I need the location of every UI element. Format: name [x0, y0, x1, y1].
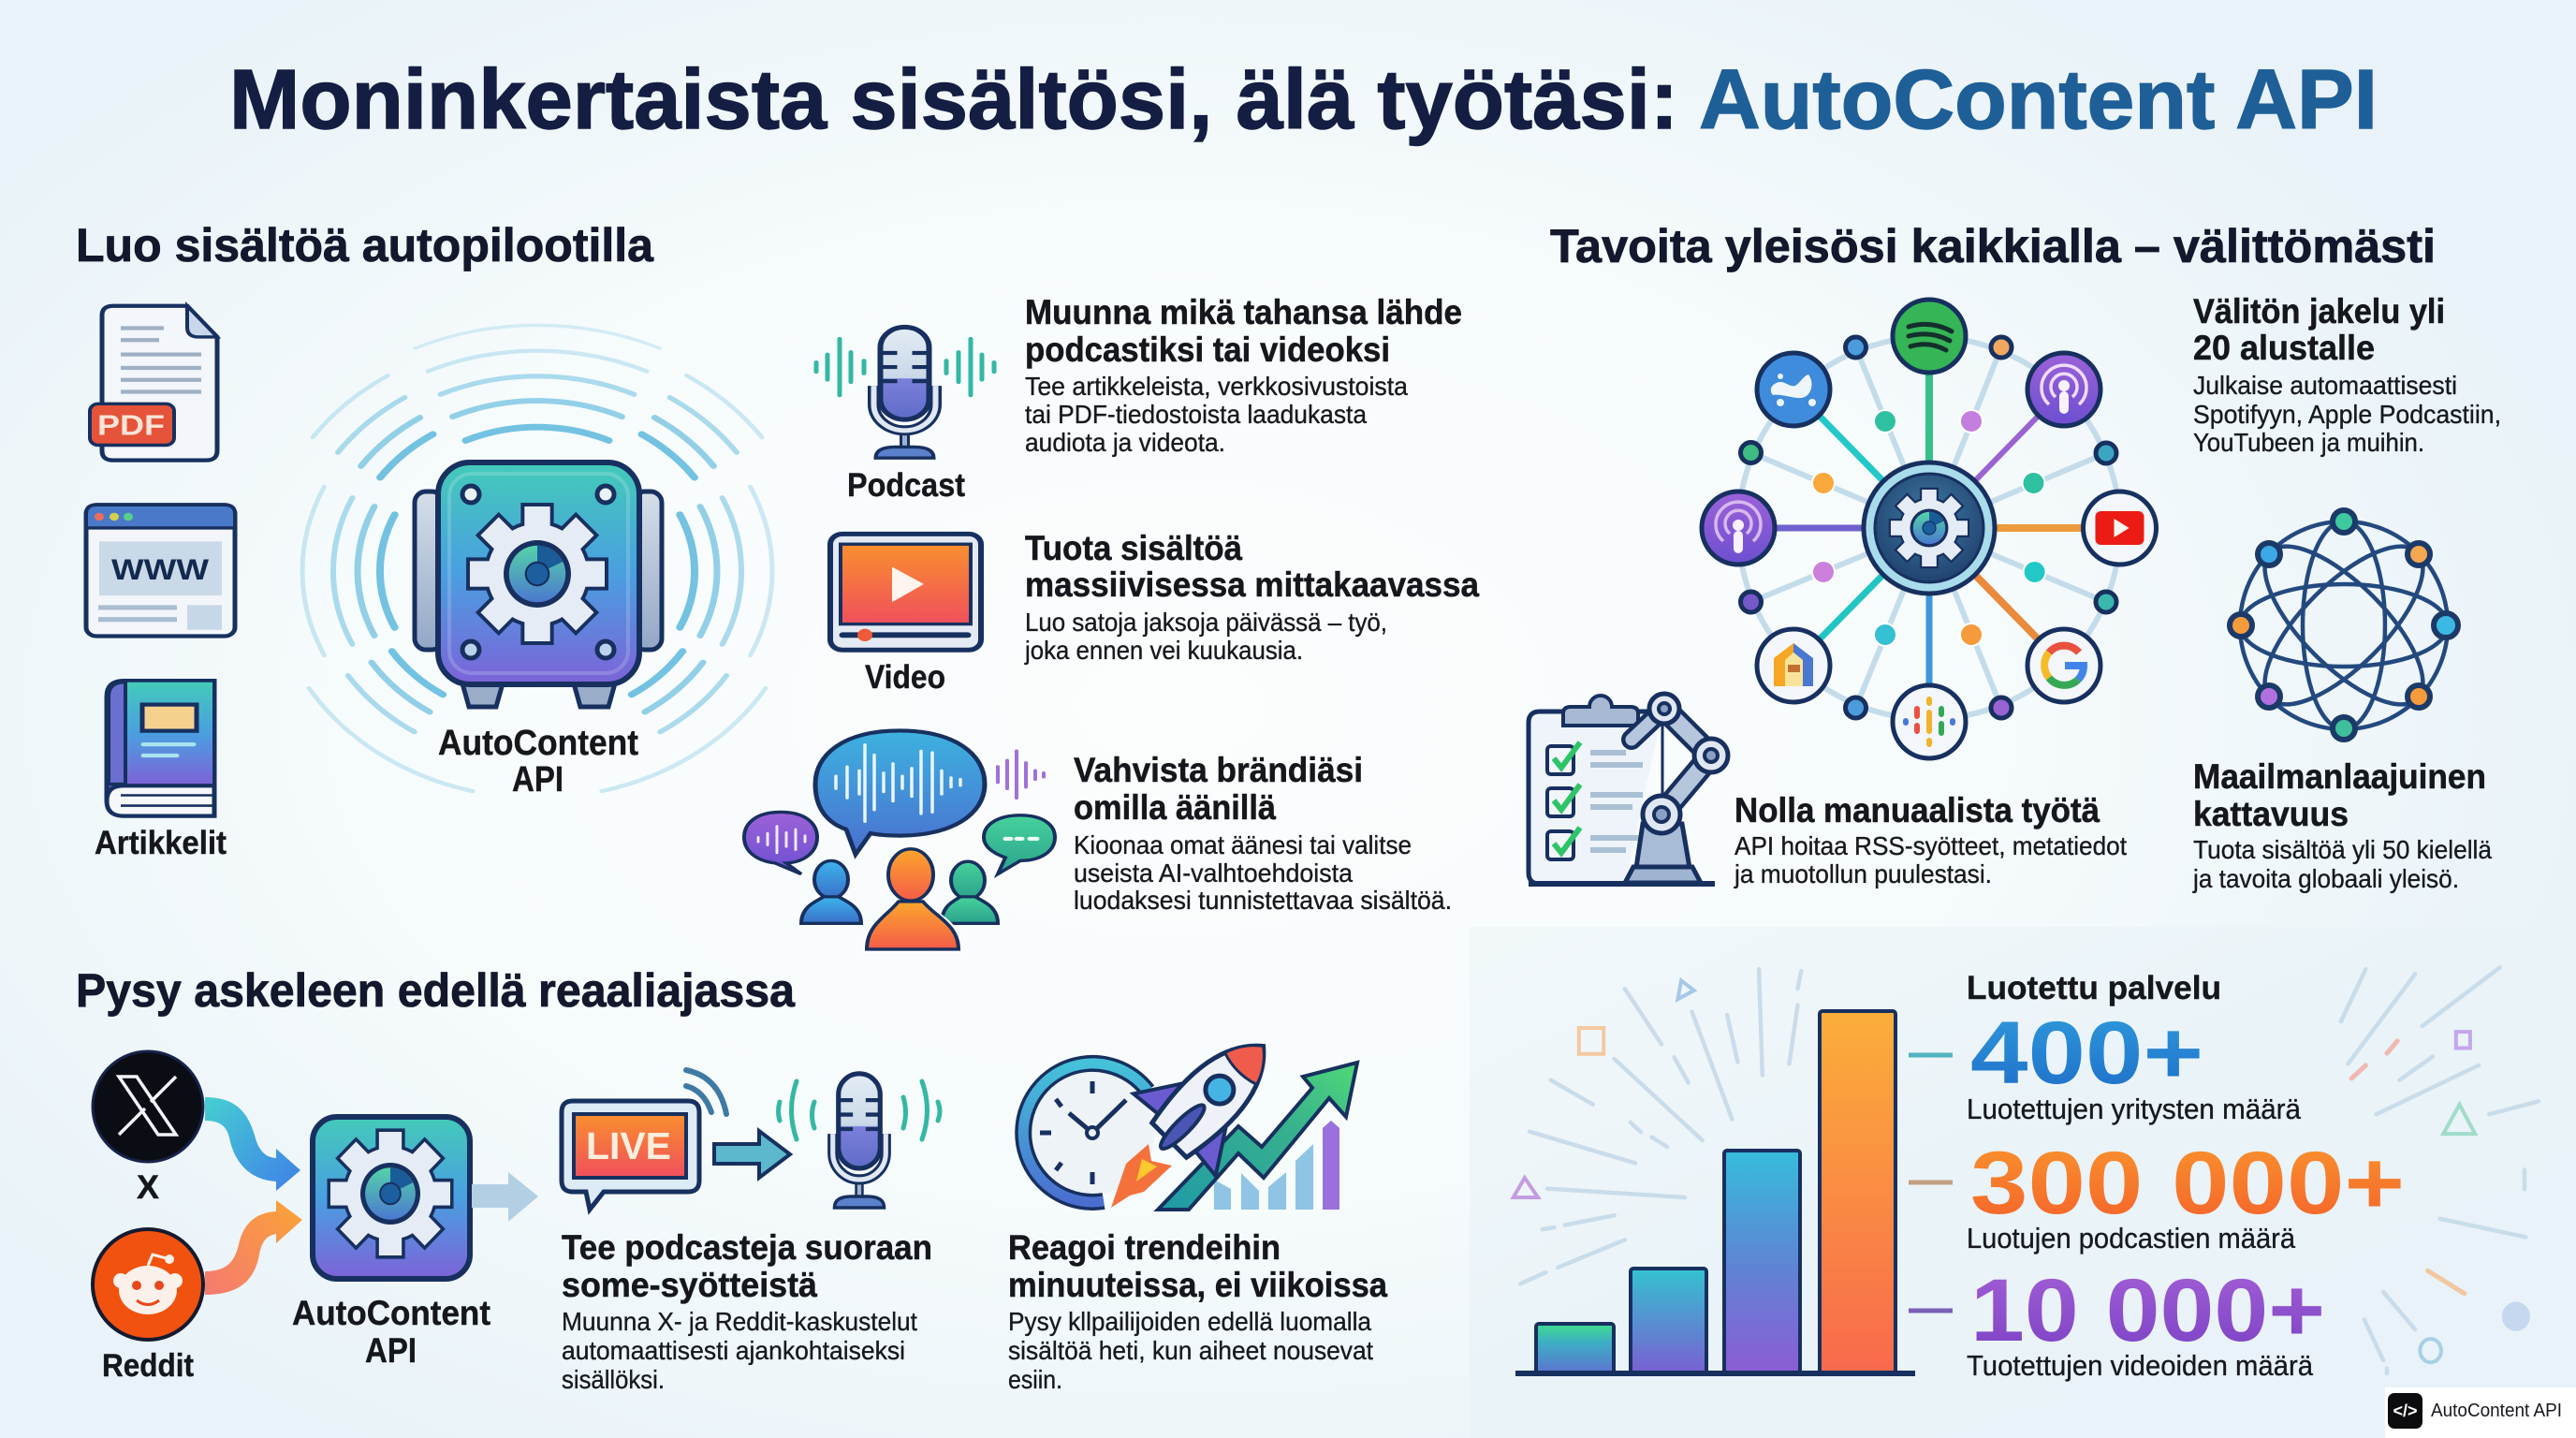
- text: strengthen brand with voices: Vahvista brändiäsi: [1074, 751, 1363, 789]
- text: podcasts from social feeds: sisällöksi.: [562, 1365, 665, 1394]
- icon: live microphone: [779, 1074, 940, 1208]
- text: instant distribution: Julkaise automaattisesti: [2193, 371, 2457, 400]
- icon: PDF document: [90, 306, 217, 461]
- text: strengthen brand with voices: omilla äänillä: [1074, 788, 1276, 827]
- icon: signal rings: [302, 325, 772, 791]
- icon: Google: [2027, 629, 2100, 702]
- text: mass scale production: Luo satoja jaksoja päivässä – työ,: [1025, 608, 1387, 637]
- label: AutoContent API: [292, 1294, 490, 1370]
- text: any source to podcast or video: podcastiksi tai videoksi: [1025, 330, 1390, 369]
- icon: YouTube: [2084, 492, 2157, 565]
- text: instant distribution: 20 alustalle: [2193, 329, 2375, 367]
- text: react to trends: esiin.: [1008, 1365, 1062, 1394]
- text: mass scale production: massiivisessa mittakaavassa: [1025, 565, 1479, 604]
- stat: 10 000+: 10 000+: [1970, 1261, 2325, 1360]
- text: zero manual work: ja muotollun puulestasi.: [1734, 859, 1992, 888]
- text: global coverage: kattavuus: [2193, 795, 2349, 833]
- label: AutoContent API: API: [512, 760, 564, 800]
- bar chart: [1515, 1011, 1915, 1373]
- icon: global network: [2230, 510, 2458, 740]
- icon: API gear box: [313, 1117, 470, 1279]
- icon: X logo: [93, 1051, 203, 1162]
- label: articles: Artikkelit: [95, 825, 227, 861]
- text: react to trends: [1008, 1228, 1387, 1394]
- text: zero manual work: API hoitaa RSS-syötteet, metatiedot: [1734, 831, 2127, 860]
- text: trusted service heading: Luotettu palvelu: [1967, 970, 2221, 1006]
- text: instant distribution: Spotifyyn, Apple Podcastiin,: [2193, 400, 2501, 429]
- label: X: X: [137, 1169, 160, 1206]
- arrow: X to API: [205, 1097, 300, 1191]
- text: podcasts from social feeds: some-syötteistä: [562, 1266, 817, 1304]
- icon: Spotify: [1893, 300, 1966, 373]
- text: react to trends: Reagoi trendeihin: [1008, 1228, 1281, 1267]
- badge: AutoContent API: </>: [2393, 1401, 2418, 1420]
- text: react to trends: minuuteissa, ei viikoissa: [1008, 1266, 1387, 1304]
- text: podcasts from social feeds: [562, 1228, 932, 1394]
- heading: reach audience: Tavoita yleisösi kaikkialla – välittömästi: [1550, 220, 2436, 272]
- panel: reach audience everywhere: [1529, 220, 2501, 893]
- panel: stay ahead in real time: [76, 964, 1387, 1394]
- text: strengthen brand with voices: luodaksesi tunnistettavaa sisältöä.: [1074, 886, 1452, 915]
- diagram: distribution network: [1702, 300, 2157, 758]
- text: strengthen brand with voices: Kioonaa omat äänesi tai valitse: [1074, 830, 1412, 859]
- icon: house platform: [1757, 629, 1830, 702]
- title: AutoContent API: [1699, 53, 2378, 147]
- stat: 400+: [1967, 1004, 2302, 1125]
- icon: central hub: [1864, 462, 1995, 594]
- heading: create on autopilot: Luo sisältöä autopilootilla: [76, 219, 654, 271]
- text: mass scale production: Tuota sisältöä: [1025, 529, 1242, 567]
- text: zero manual work: [1734, 791, 2127, 888]
- icon: video player: [830, 534, 981, 650]
- text: any source to podcast or video: tai PDF-tiedostoista laadukasta: [1025, 400, 1367, 429]
- icon: clock rocket and growth arrow: [1023, 1005, 1357, 1210]
- small nodes: [1741, 337, 2116, 718]
- mid nodes: [1812, 410, 2046, 646]
- decorative confetti: [1514, 968, 2539, 1373]
- text: global coverage: Tuota sisältöä yli 50 kielellä: [2193, 835, 2492, 864]
- label: AutoContent API: AutoContent: [292, 1294, 490, 1332]
- arrow: API to live: [472, 1172, 538, 1222]
- text: zero manual work: Nolla manuaalista työtä: [1734, 791, 2100, 829]
- title: [229, 53, 2378, 147]
- icon: live bubble: LIVE: [586, 1124, 671, 1167]
- panel: trusted service: [1470, 927, 2576, 1438]
- text: podcasts from social feeds: Muunna X- ja Reddit-kaskustelut: [562, 1307, 917, 1336]
- text: mass scale production: [1024, 529, 1479, 665]
- icon: web page: WWW: [111, 554, 210, 586]
- text: instant distribution: YouTubeen ja muihin.: [2193, 428, 2424, 457]
- label: AutoContent API: AutoContent: [438, 724, 638, 763]
- icon: book: [107, 681, 214, 816]
- text: strengthen brand with voices: useista AI-valhtoehdoista: [1074, 858, 1353, 888]
- stat: 300 000+: Luotujen podcastien määrä: [1967, 1222, 2296, 1255]
- text: instant distribution: Välitön jakelu yli: [2193, 292, 2445, 330]
- label: podcast: Podcast: [847, 467, 965, 504]
- text: react to trends: sisältöä heti, kun aiheet nousevat: [1008, 1336, 1373, 1365]
- text: instant distribution: [2193, 292, 2501, 457]
- icon: voice bubbles and people: [744, 730, 1055, 949]
- text: global coverage: [2192, 757, 2492, 893]
- text: any source to podcast or video: Tee artikkeleista, verkkosivustoista: [1025, 372, 1408, 401]
- stat: 300 000+: 300 000+: [1970, 1134, 2405, 1233]
- text: podcasts from social feeds: Tee podcasteja suoraan: [562, 1228, 932, 1267]
- label: video: Video: [865, 659, 945, 696]
- stat: 400+: 400+: [1970, 1004, 2203, 1103]
- panel: create on autopilot: [76, 219, 1479, 949]
- label: Reddit: Reddit: [102, 1348, 194, 1384]
- badge: AutoContent API: [2385, 1387, 2576, 1438]
- icon: Reddit logo: [93, 1229, 203, 1340]
- icon: podcast microphone: [816, 327, 994, 458]
- icon: AutoContent API device: [415, 462, 662, 707]
- stat: 400+: Luotettujen yritysten määrä: [1967, 1093, 2302, 1125]
- icon: Apple Podcasts purple: [2027, 353, 2100, 426]
- icon: live bubble: [562, 1070, 726, 1210]
- text: global coverage: Maailmanlaajuinen: [2193, 757, 2486, 796]
- icon: purple podcast: [1702, 492, 1775, 565]
- text: any source to podcast or video: [1025, 293, 1462, 457]
- icon: robot arm and checklist: [1529, 694, 1728, 884]
- arrow: live to podcast: [714, 1131, 790, 1178]
- icon: Google Podcasts: [1893, 685, 1966, 758]
- icon: blue platform: [1757, 353, 1830, 426]
- label: AutoContent API: [438, 724, 638, 800]
- text: any source to podcast or video: audiota ja videota.: [1025, 428, 1225, 457]
- legend connector dashes: [1909, 1055, 1953, 1311]
- badge: AutoContent API: AutoContent API: [2431, 1401, 2562, 1421]
- text: podcasts from social feeds: automaattisesti ajankohtaiseksi: [562, 1336, 905, 1365]
- text: strengthen brand with voices: [1074, 751, 1452, 915]
- text: react to trends: Pysy kllpailijoiden edellä luomalla: [1008, 1307, 1371, 1336]
- stat: 10 000+: Tuotettujen videoiden määrä: [1967, 1349, 2314, 1382]
- icon: PDF document: PDF: [97, 410, 165, 442]
- text: any source to podcast or video: Muunna mikä tahansa lähde: [1025, 293, 1462, 331]
- icon: web page: [86, 505, 235, 637]
- text: global coverage: ja tavoita globaali yleisö.: [2192, 864, 2459, 893]
- arrow: Reddit to API: [205, 1200, 302, 1295]
- heading: stay ahead: Pysy askeleen edellä reaaliajassa: [76, 964, 796, 1017]
- title: Moninkertaista sisältösi, älä työtäsi:: [229, 53, 1678, 147]
- text: mass scale production: joka ennen vei kuukausia.: [1024, 636, 1303, 665]
- label: AutoContent API: API: [365, 1331, 417, 1370]
